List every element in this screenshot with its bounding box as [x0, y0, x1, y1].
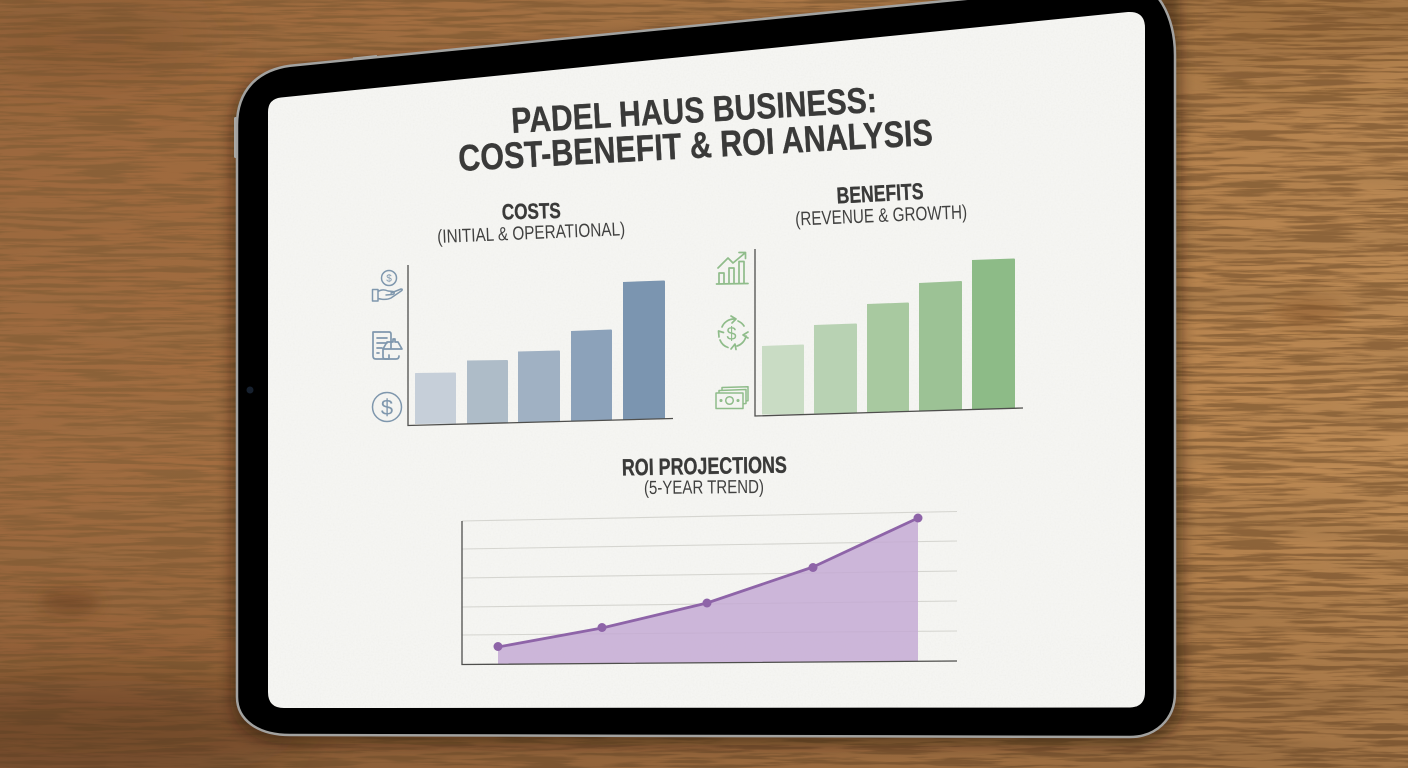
icon: dollar coin: $ [381, 395, 393, 420]
panel: roi projections [462, 452, 957, 664]
heading: roi projections: ROI PROJECTIONS [622, 452, 787, 480]
tablet shadow [231, 0, 1184, 746]
tablet camera [246, 386, 254, 394]
tablet top button [353, 56, 377, 59]
icon: revenue cycle: $ [726, 324, 737, 344]
heading: costs: (INITIAL & OPERATIONAL) [437, 219, 626, 248]
icon: revenue cycle [718, 316, 748, 350]
heading: costs: COSTS [501, 198, 561, 224]
heading: benefits [795, 178, 968, 230]
chart axes [755, 249, 1023, 416]
tablet side button [234, 117, 238, 158]
trend line [498, 518, 918, 647]
panel: costs [372, 198, 673, 426]
icon: hand holding coin [372, 270, 402, 301]
icon: banknotes [716, 387, 748, 408]
icon: dollar coin [372, 392, 402, 422]
bar chart: costs [408, 265, 673, 426]
title: PADEL HAUS BUSINESS: [510, 79, 878, 141]
panel: benefits [716, 178, 1023, 416]
icon: growth chart [716, 252, 748, 284]
heading: benefits: (REVENUE & GROWTH) [795, 201, 968, 230]
area fill [498, 518, 918, 664]
bar chart: benefits [755, 249, 1023, 416]
heading: roi projections [622, 452, 787, 499]
tablet body [237, 0, 1175, 737]
icon: hand holding coin: $ [386, 274, 392, 284]
chart axes [408, 265, 673, 426]
chart axes [462, 521, 957, 664]
heading: roi projections: (5-YEAR TREND) [644, 477, 764, 499]
data points [494, 514, 922, 651]
area line chart: roi [462, 512, 957, 664]
icon: document with receipt [373, 332, 402, 359]
tablet screen [260, 0, 1160, 720]
heading: costs [437, 198, 626, 248]
heading: benefits: BENEFITS [836, 178, 924, 208]
title [457, 79, 934, 179]
title: COST-BENEFIT & ROI ANALYSIS [457, 112, 934, 179]
